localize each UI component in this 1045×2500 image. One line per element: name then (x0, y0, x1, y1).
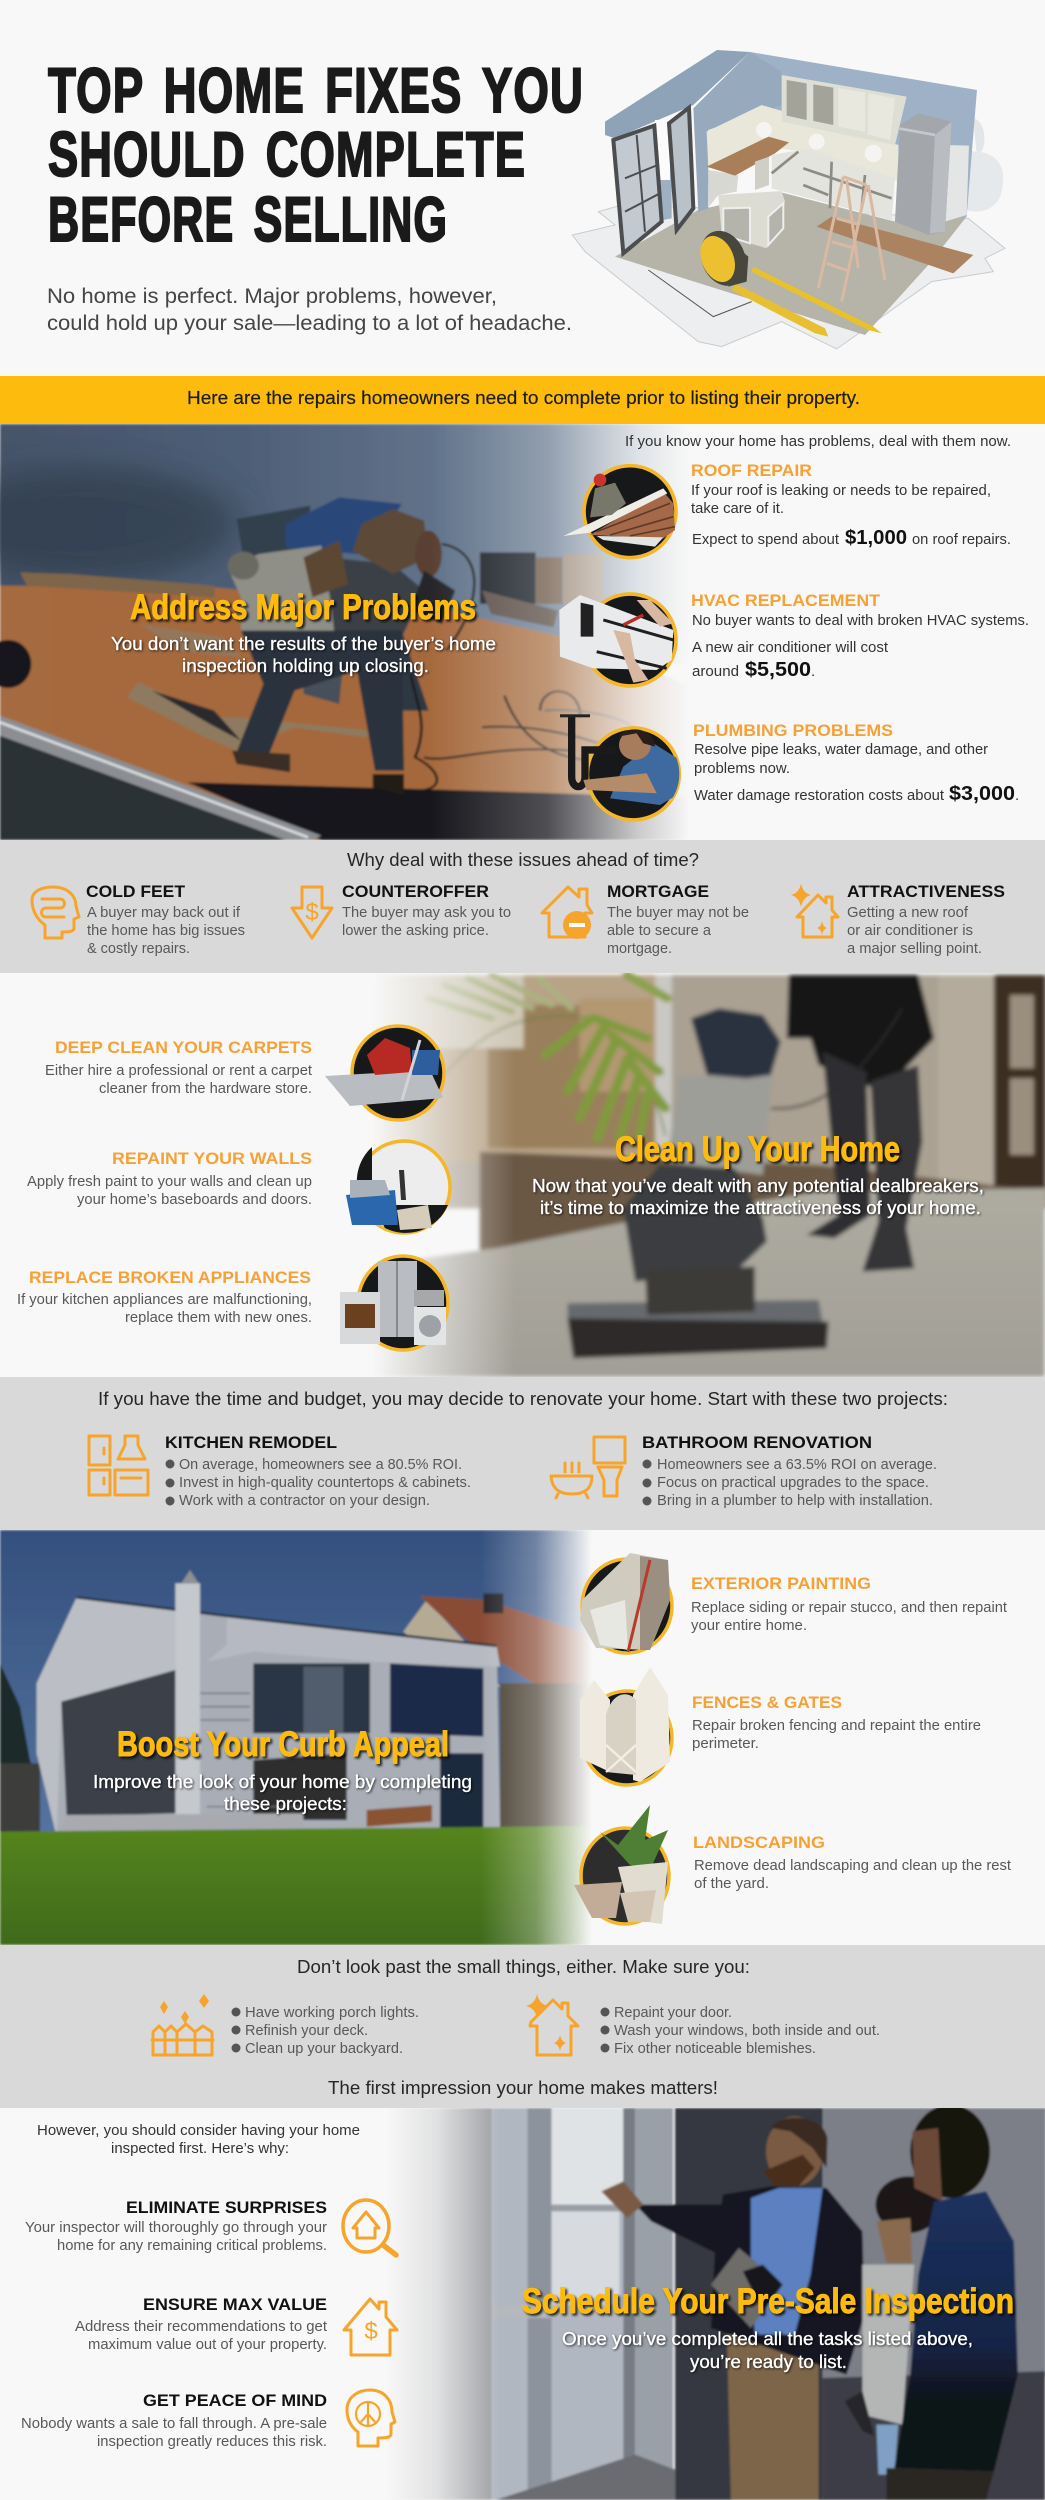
sub text: these projects: (224, 1794, 347, 1814)
icon: appliances photo (340, 1256, 448, 1350)
sub text (562, 2329, 973, 2372)
roof repair text: If your roof is leaking or needs to be repaired, (691, 482, 991, 499)
icon: dollar down arrow (292, 887, 332, 938)
appliances text: If your kitchen appliances are malfunctioning, (17, 1291, 312, 1308)
HVAC text: A new air conditioner will cost (692, 639, 889, 656)
sub text: Improve the look of your home by completing (93, 1772, 472, 1792)
icon: roof repair photo (563, 466, 676, 558)
HVAC text (691, 591, 1029, 681)
eliminate surprises text: Your inspector will thoroughly go through your (25, 2219, 327, 2236)
fade: photo into background (480, 1530, 1045, 1945)
eliminate surprises text: home for any remaining critical problems. (57, 2237, 327, 2254)
panel: boost your curb appeal (0, 1530, 1045, 1945)
bathroom renovation text (642, 1433, 937, 1509)
icon: dollar down arrow: $ (305, 899, 319, 926)
title: BEFORE SELLING (48, 185, 448, 255)
mortgage text: MORTGAGE (607, 882, 709, 901)
landscaping text: Remove dead landscaping and clean up the rest (694, 1857, 1012, 1874)
walls text (27, 1149, 312, 1208)
band heading: If you have the time and budget, you may decide to renovate your home. Start with these two projects: (98, 1389, 948, 1409)
photo: modern white house with lawn (0, 1530, 589, 1945)
first checklist: Clean up your backyard. (245, 2040, 403, 2057)
heading: Clean Up Your Home (615, 1130, 900, 1169)
peace of mind text (21, 2391, 327, 2450)
bathroom renovation text: Focus on practical upgrades to the space. (657, 1474, 929, 1491)
icon: house with sparkles (791, 884, 838, 937)
HVAC text: $5,500 (745, 659, 811, 681)
panel: small things (0, 1945, 1045, 2108)
band heading: Don’t look past the small things, either. Make sure you: (297, 1957, 750, 1977)
heading: Address Major Problems (130, 588, 476, 627)
attractiveness text (847, 882, 1005, 957)
fences text: Repair broken fencing and repaint the entire (692, 1717, 981, 1734)
second checklist (600, 2004, 880, 2057)
fade: background into photo (0, 2108, 500, 2500)
ensure max value text (75, 2295, 328, 2353)
exterior painting text: Replace siding or repair stucco, and then repaint (691, 1599, 1008, 1616)
carpets text: cleaner from the hardware store. (99, 1080, 312, 1097)
bathroom renovation text: Homeowners see a 63.5% ROI on average. (657, 1456, 937, 1473)
title: TOP HOME FIXES YOU (48, 56, 584, 126)
lead-in (37, 2122, 360, 2157)
panel: renovation projects (0, 1377, 1045, 1530)
peace of mind text: inspection greatly reduces this risk. (97, 2433, 327, 2450)
sub text: inspection holding up closing. (182, 656, 429, 676)
icon: kitchen (89, 1436, 148, 1495)
icon: house with sparkles (526, 1994, 578, 2055)
walls text: Apply fresh paint to your walls and clean up (27, 1173, 312, 1190)
second checklist: Repaint your door. (614, 2004, 732, 2021)
HVAC text: HVAC REPLACEMENT (691, 591, 881, 610)
kitchen remodel text: Invest in high-quality countertops & cabinets. (179, 1474, 471, 1491)
sub text: Now that you’ve dealt with any potential dealbreakers, (532, 1176, 984, 1196)
icon: HVAC photo (559, 594, 676, 686)
icon: plumbing photo (560, 714, 680, 820)
appliances text (17, 1268, 312, 1326)
fade: background into photo (0, 973, 515, 1377)
sub text: you’re ready to list. (690, 2352, 847, 2372)
roof repair text (691, 461, 1011, 549)
intro text: No home is perfect. Major problems, however, (47, 285, 497, 308)
exterior painting text: EXTERIOR PAINTING (691, 1574, 871, 1593)
sub text: Once you’ve completed all the tasks listed above, (562, 2329, 973, 2349)
icon: exterior painting photo (580, 1553, 672, 1653)
sub text (532, 1176, 984, 1218)
sub text: it’s time to maximize the attractiveness of your home. (540, 1198, 981, 1218)
counteroffer text: The buyer may ask you to (342, 904, 511, 921)
second checklist: Fix other noticeable blemishes. (614, 2040, 816, 2057)
intro text: could hold up your sale—leading to a lot of headache. (47, 312, 572, 335)
cold feet text (86, 882, 245, 957)
cold feet text: & costly repairs. (87, 940, 190, 957)
mortgage text: able to secure a (607, 922, 712, 939)
photo: vacuuming a carpet (382, 973, 1045, 1377)
roof repair text: Expect to spend about (692, 531, 840, 548)
icon: house with dollar (344, 2299, 397, 2355)
plumbing text: . (1015, 787, 1019, 804)
roof repair text: on roof repairs. (912, 531, 1011, 548)
roof repair text: ROOF REPAIR (691, 461, 812, 480)
banner (0, 376, 1045, 424)
walls text: your home’s baseboards and doors. (77, 1191, 312, 1208)
ensure max value text: maximum value out of your property. (88, 2336, 327, 2353)
plumbing text: Water damage restoration costs about (694, 787, 945, 804)
bathroom renovation text: Bring in a plumber to help with installation. (657, 1492, 933, 1509)
carpets text: DEEP CLEAN YOUR CARPETS (55, 1038, 312, 1057)
cold feet text: A buyer may back out if (87, 904, 241, 921)
lead-in: However, you should consider having your home (37, 2122, 360, 2139)
HVAC text: around (692, 663, 739, 680)
bathroom renovation text: BATHROOM RENOVATION (642, 1433, 872, 1452)
kitchen remodel text: On average, homeowners see a 80.5% ROI. (179, 1456, 462, 1473)
icon: paint supplies photo (346, 1141, 450, 1233)
ensure max value text: Address their recommendations to get (75, 2318, 328, 2335)
plumbing text: problems now. (694, 760, 790, 777)
fences text (692, 1693, 981, 1752)
attractiveness text: a major selling point. (847, 940, 982, 957)
panel: why deal with these issues (0, 840, 1045, 973)
landscaping text (693, 1833, 1012, 1892)
lead-in: inspected first. Here’s why: (111, 2140, 289, 2157)
icon: fence and gate photo (580, 1667, 672, 1785)
title: SHOULD COMPLETE (48, 120, 526, 190)
closing line: The first impression your home makes matters! (328, 2078, 718, 2098)
mortgage text: mortgage. (607, 940, 672, 957)
counteroffer text: lower the asking price. (342, 922, 489, 939)
plumbing text (693, 721, 1019, 805)
photo: roofers working on a roof (0, 424, 700, 840)
cold feet text: COLD FEET (86, 882, 186, 901)
sub text (111, 634, 496, 676)
fences text: FENCES & GATES (692, 1693, 842, 1712)
peace of mind text: Nobody wants a sale to fall through. A pre-sale (21, 2415, 327, 2432)
roof repair text: $1,000 (845, 527, 907, 549)
icon: landscaping plants photo (574, 1805, 669, 1924)
plumbing text: PLUMBING PROBLEMS (693, 721, 893, 740)
appliances text: REPLACE BROKEN APPLIANCES (29, 1268, 311, 1287)
photo: agent showing a couple a window (372, 2105, 1045, 2500)
exterior painting text (691, 1574, 1008, 1634)
walls text: REPAINT YOUR WALLS (112, 1149, 312, 1168)
icon: house with dollar: $ (364, 2318, 378, 2345)
banner text: Here are the repairs homeowners need to complete prior to listing their property. (187, 388, 860, 408)
icon: house with minus (542, 887, 592, 939)
landscaping text: LANDSCAPING (693, 1833, 825, 1852)
panel: address major problems (0, 424, 1045, 840)
title (48, 56, 584, 255)
HVAC text: . (811, 663, 815, 680)
fences text: perimeter. (692, 1735, 759, 1752)
second checklist: Wash your windows, both inside and out. (614, 2022, 880, 2039)
sub text (93, 1772, 472, 1814)
heading: Boost Your Curb Appeal (117, 1725, 449, 1764)
HVAC text: No buyer wants to deal with broken HVAC systems. (692, 612, 1029, 629)
mortgage text: The buyer may not be (607, 904, 749, 921)
cold feet text: the home has big issues (87, 922, 245, 939)
kitchen remodel text (165, 1433, 471, 1509)
counteroffer text: COUNTEROFFER (342, 882, 489, 901)
kitchen remodel text: KITCHEN REMODEL (165, 1433, 337, 1452)
attractiveness text: ATTRACTIVENESS (847, 882, 1005, 901)
attractiveness text: or air conditioner is (847, 922, 973, 939)
plumbing text: Resolve pipe leaks, water damage, and other (694, 741, 988, 758)
eliminate surprises text (25, 2198, 327, 2254)
attractiveness text: Getting a new roof (847, 904, 969, 921)
illustration: kitchen floor plan model (572, 50, 1005, 349)
icon: bathroom (551, 1437, 625, 1498)
mortgage text (607, 882, 749, 957)
counteroffer text (342, 882, 511, 939)
icon: magnifying glass over house (343, 2200, 396, 2255)
lead-in: If you know your home has problems, deal with them now. (625, 433, 1011, 450)
first checklist: Have working porch lights. (245, 2004, 419, 2021)
icon: carpet cleaner photo (325, 1026, 444, 1120)
plumbing text: $3,000 (949, 783, 1015, 805)
first checklist: Refinish your deck. (245, 2022, 368, 2039)
carpets text (45, 1038, 313, 1097)
carpets text: Either hire a professional or rent a carpet (45, 1062, 313, 1079)
band heading: Why deal with these issues ahead of time? (347, 850, 699, 870)
kitchen remodel text: Work with a contractor on your design. (179, 1492, 430, 1509)
first checklist (232, 2004, 419, 2057)
exterior painting text: your entire home. (691, 1617, 807, 1634)
roof repair text: take care of it. (691, 500, 784, 517)
icon: head (32, 887, 79, 938)
panel: clean up your home (0, 973, 1045, 1377)
peace of mind text: GET PEACE OF MIND (143, 2391, 327, 2410)
landscaping text: of the yard. (694, 1875, 769, 1892)
ensure max value text: ENSURE MAX VALUE (143, 2295, 327, 2314)
intro text (47, 285, 572, 335)
fade: photo into background (430, 424, 1045, 840)
icon: fence with sparkles (152, 1994, 213, 2055)
eliminate surprises text: ELIMINATE SURPRISES (126, 2198, 327, 2217)
panel: schedule your pre-sale inspection (0, 2105, 1045, 2500)
appliances text: replace them with new ones. (125, 1309, 312, 1326)
sub text: You don’t want the results of the buyer’s home (111, 634, 496, 654)
icon: head with peace sign (347, 2390, 395, 2446)
